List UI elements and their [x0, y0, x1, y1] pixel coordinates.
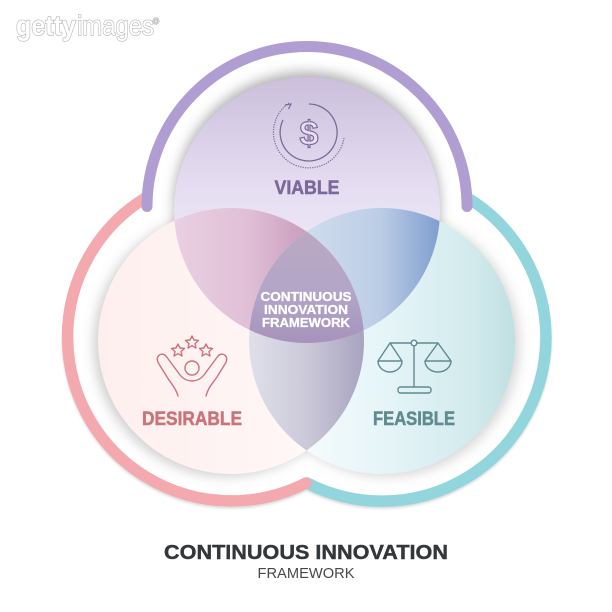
ring: feasible teal [307, 198, 546, 501]
ring shadow [68, 340, 546, 503]
center label: INNOVATION [264, 302, 348, 317]
watermark: gettyimages [16, 10, 159, 41]
icon: dollar coin with dotted arrow: $ [300, 115, 319, 153]
label: feasible: FEASIBLE [373, 409, 455, 430]
watermark: gettyimages: getty [16, 10, 76, 41]
outer rings [67, 46, 546, 503]
icon: balance scale [378, 340, 451, 393]
icon: dollar coin with dotted arrow [273, 103, 344, 168]
label: desirable: DESIRABLE [142, 409, 242, 430]
watermark: gettyimages: images [77, 10, 154, 41]
circle shadows [94, 72, 519, 476]
title: CONTINUOUS INNOVATION [164, 542, 448, 564]
watermark: gettyimages: ® [153, 17, 159, 26]
overlap: viable and feasible [290, 208, 440, 330]
overlap: center [250, 232, 364, 343]
ring: desirable pink [67, 198, 306, 501]
overlap: desirable and feasible [249, 264, 364, 450]
ring: viable purple [147, 46, 467, 206]
icon: cheering person with stars [157, 336, 227, 396]
center label [260, 289, 352, 330]
venn circle: viable [174, 77, 440, 343]
overlap: viable and desirable [174, 208, 306, 330]
label: viable: VIABLE [274, 178, 340, 199]
center label: FRAMEWORK [262, 315, 351, 330]
subtitle: FRAMEWORK [258, 566, 355, 582]
venn circle: feasible [249, 208, 515, 474]
venn circle: desirable [98, 208, 364, 474]
center label: CONTINUOUS [260, 289, 352, 304]
